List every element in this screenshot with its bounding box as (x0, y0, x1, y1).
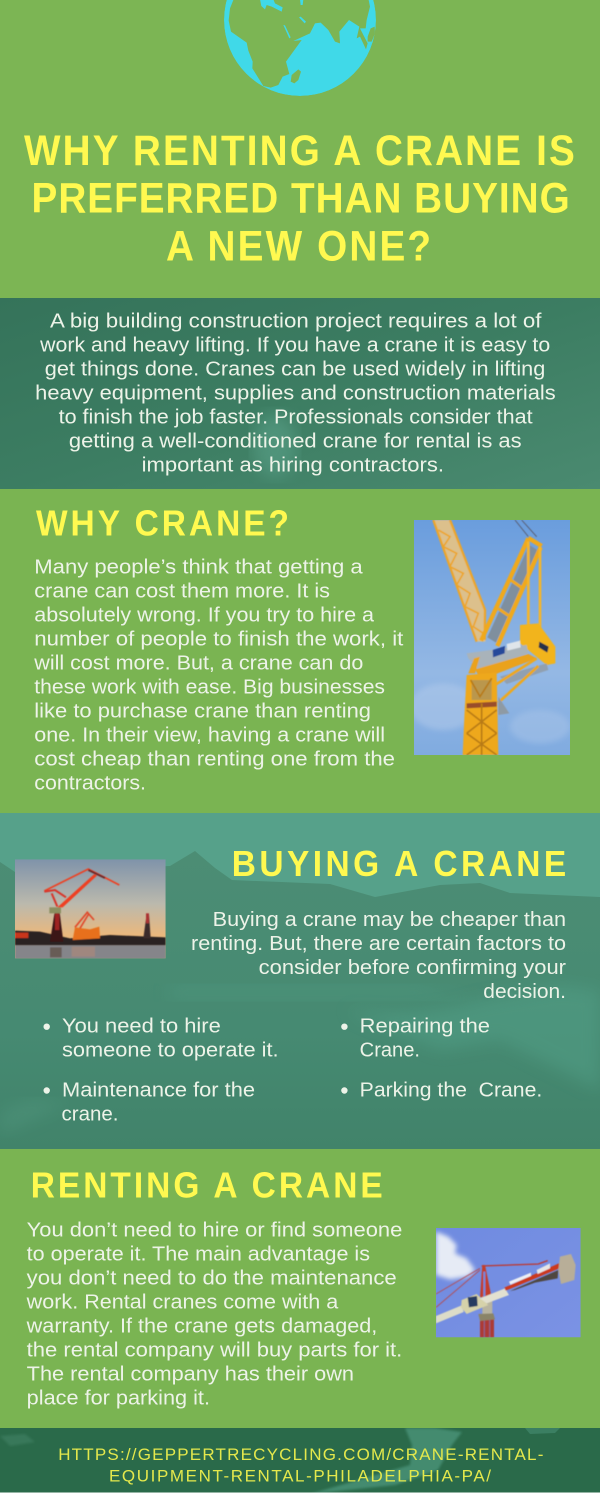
why crane text: contractors. (34, 772, 146, 794)
why crane text: number of people to finish the work, it (34, 628, 404, 650)
buying text: decision. (483, 981, 566, 1003)
why crane text: one. In their view, having a crane will (34, 724, 385, 746)
renting text: warranty. If the crane gets damaged, (26, 1316, 377, 1338)
buying text: renting. But, there are certain factors to (191, 933, 566, 955)
bullet list: factors left column: You need to hire (62, 1015, 221, 1037)
photo: red and white crane against blue sky (436, 1228, 581, 1337)
panel: renting a crane (0, 1149, 600, 1428)
photo: red dockside crane at sunset (15, 859, 166, 959)
intro text: get things done. Cranes can be used widely in lifting (45, 358, 545, 380)
renting text: You don’t need to hire or find someone (27, 1220, 402, 1242)
renting text: The rental company has their own (27, 1364, 354, 1386)
renting text: to operate it. The main advantage is (27, 1244, 370, 1266)
panel: footer link (0, 1428, 600, 1494)
bullet list: factors left column (44, 1015, 279, 1126)
why crane text: Many people’s think that getting a (34, 556, 364, 578)
buying text (191, 909, 566, 1003)
title: A NEW ONE? (166, 222, 431, 270)
title: PREFERRED THAN BUYING (32, 174, 570, 222)
panel: title header (0, 0, 600, 298)
renting text: work. Rental cranes come with a (26, 1292, 339, 1314)
heading: why crane: WHY CRANE? (36, 505, 289, 544)
renting text: place for parking it. (27, 1388, 210, 1410)
photo: yellow tower crane against blue sky (410, 520, 570, 755)
why crane text: cost cheap than renting one from the (34, 748, 395, 770)
renting text (26, 1220, 402, 1410)
panel: buying a crane (0, 813, 600, 1149)
intro text: heavy equipment, supplies and construction materials (35, 382, 556, 404)
footer url: EQUIPMENT-RENTAL-PHILADELPHIA-PA/ (109, 1466, 491, 1485)
why crane text: will cost more. But, a crane can do (33, 652, 363, 674)
why crane text: like to purchase crane than renting (34, 700, 371, 722)
panel: why crane (0, 489, 600, 813)
title (24, 126, 575, 270)
why crane text: absolutely wrong. If you try to hire a (34, 604, 375, 626)
bullet list: factors right column: Repairing the (360, 1015, 490, 1037)
intro text: to finish the job faster. Professionals consider that (59, 406, 533, 428)
icon: globe (224, 0, 376, 96)
bullet list: factors right column: Parking the Crane. (360, 1080, 542, 1102)
bullet list: factors right column (341, 1015, 542, 1102)
intro text: getting a well-conditioned crane for rental is as (69, 430, 522, 452)
bullet list: factors right column: Crane. (360, 1039, 420, 1061)
panel: introduction (0, 298, 600, 489)
bullet list: factors left column: Maintenance for the (62, 1080, 255, 1102)
heading: renting a crane: RENTING A CRANE (31, 1166, 383, 1206)
renting text: you don’t need to do the maintenance (27, 1268, 397, 1290)
buying text: consider before confirming your (259, 957, 566, 979)
footer url: HTTPS://GEPPERTRECYCLING.COM/CRANE-RENTAL- (58, 1445, 543, 1464)
title: WHY RENTING A CRANE IS (24, 126, 575, 174)
buying text: Buying a crane may be cheaper than (213, 909, 566, 931)
intro text (35, 310, 556, 476)
why crane text (33, 556, 404, 794)
intro text: A big building construction project requires a lot of (50, 310, 542, 332)
why crane text: these work with ease. Big businesses (34, 676, 385, 698)
renting text: the rental company will buy parts for it. (27, 1340, 402, 1362)
footer url (58, 1445, 543, 1485)
intro text: important as hiring contractors. (142, 454, 444, 476)
heading: buying a crane: BUYING A CRANE (232, 845, 566, 884)
why crane text: crane can cost them more. It is (34, 580, 330, 602)
intro text: work and heavy lifting. If you have a crane it is easy to (39, 334, 550, 356)
bullet list: factors left column: someone to operate it. (62, 1039, 279, 1061)
bullet list: factors left column: crane. (62, 1104, 118, 1126)
